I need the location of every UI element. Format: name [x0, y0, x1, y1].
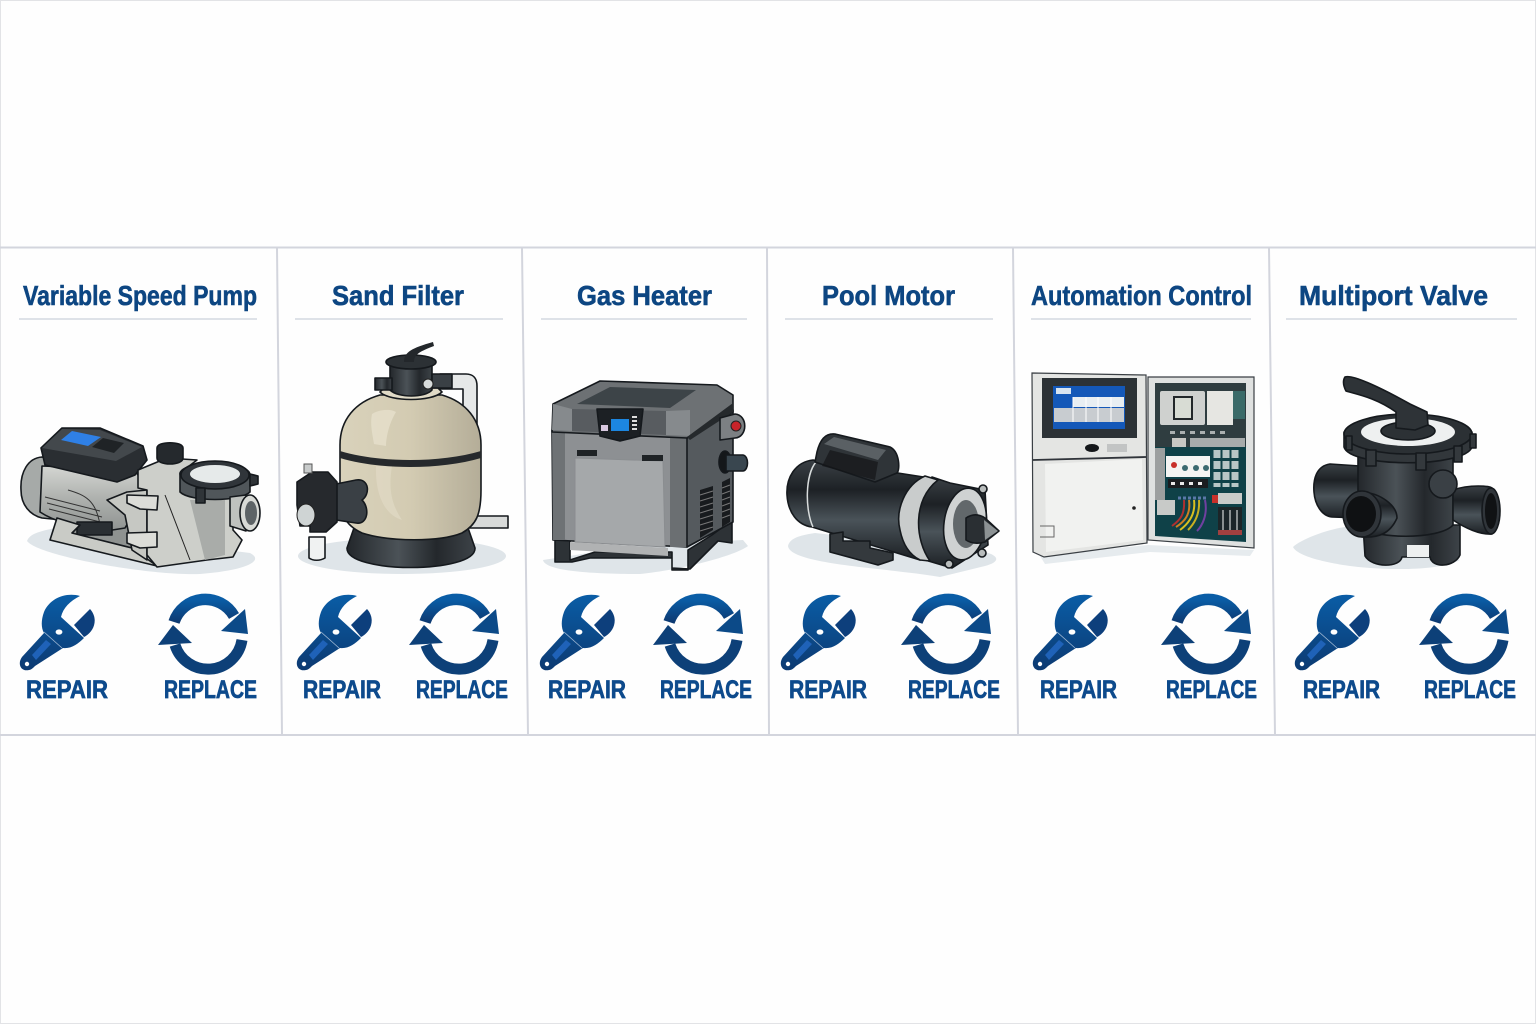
- icon: repair wrench: [781, 595, 856, 670]
- illustration: control panel: [1032, 373, 1254, 564]
- panel: multiport valve: [1286, 280, 1517, 704]
- label: repair: REPAIR: [789, 676, 867, 704]
- label: repair: REPAIR: [303, 676, 381, 704]
- icon: repair wrench: [1033, 595, 1108, 670]
- illustration: sand filter: [297, 342, 508, 574]
- icon: repair wrench: [20, 595, 95, 670]
- panel: pool motor: [781, 280, 1000, 704]
- label: replace: REPLACE: [660, 676, 752, 704]
- illustration: motor: [787, 434, 999, 577]
- icon: repair wrench: [297, 595, 372, 670]
- heading: Pool Motor: Pool Motor: [822, 280, 955, 311]
- icon: replace arrows: [901, 599, 991, 669]
- panel: sand filter: [295, 280, 508, 704]
- illustration: pump: [21, 428, 260, 574]
- label: repair: REPAIR: [548, 676, 626, 704]
- heading: Multiport Valve: Multiport Valve: [1299, 280, 1488, 311]
- icon: replace arrows: [653, 599, 743, 669]
- label: replace: REPLACE: [164, 676, 257, 704]
- icon: replace arrows: [409, 599, 499, 669]
- icon: replace arrows: [1161, 599, 1251, 669]
- heading: Variable Speed Pump: Variable Speed Pump: [23, 280, 257, 311]
- panel: gas heater: [540, 280, 752, 704]
- panel: automation control: [1031, 280, 1257, 704]
- icon: replace arrows: [1419, 599, 1509, 669]
- label: replace: REPLACE: [1166, 676, 1257, 704]
- icon: repair wrench: [540, 595, 615, 670]
- heading: Sand Filter: Sand Filter: [332, 280, 464, 311]
- panel: variable speed pump: [19, 280, 260, 704]
- heading: Automation Control: Automation Control: [1031, 280, 1252, 311]
- label: replace: REPLACE: [416, 676, 508, 704]
- label: repair: REPAIR: [26, 676, 108, 704]
- illustration: valve: [1293, 377, 1500, 569]
- label: repair: REPAIR: [1303, 676, 1380, 704]
- label: repair: REPAIR: [1040, 676, 1117, 704]
- icon: replace arrows: [158, 599, 248, 669]
- illustration: heater: [543, 381, 748, 574]
- label: replace: REPLACE: [908, 676, 1000, 704]
- heading: Gas Heater: Gas Heater: [577, 280, 712, 311]
- icon: repair wrench: [1295, 595, 1370, 670]
